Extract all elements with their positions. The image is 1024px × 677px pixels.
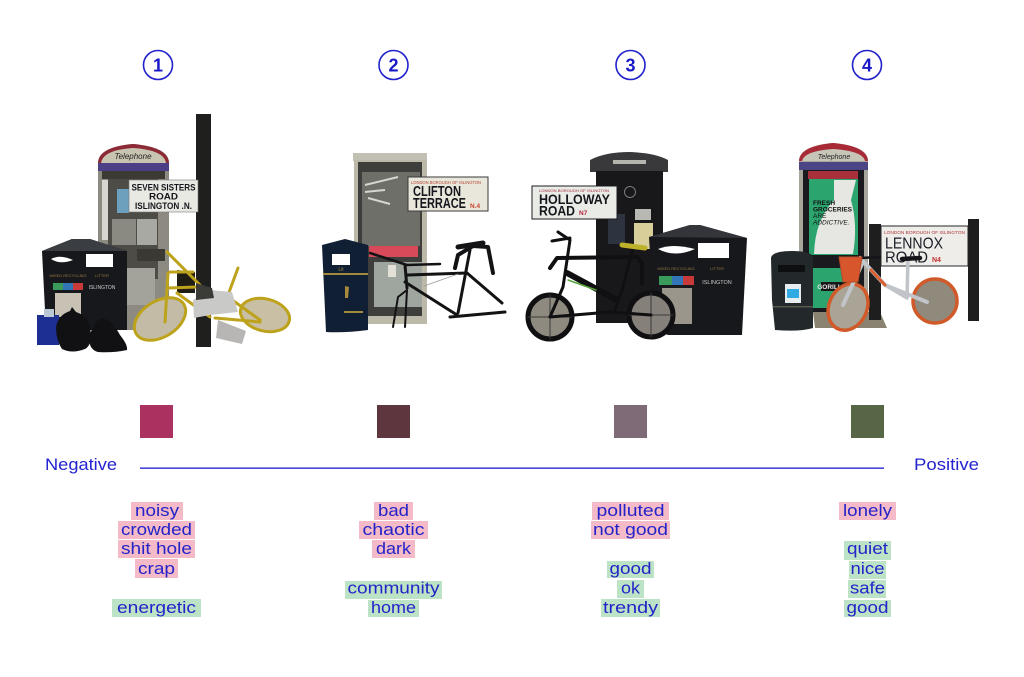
black phone kiosk	[590, 152, 668, 323]
number badge 4: 4	[862, 56, 872, 76]
word list column 1: shit hole	[121, 539, 192, 558]
signposts and street sign: ROAD	[885, 250, 928, 266]
phone box	[98, 144, 169, 330]
street sign: ROAD	[539, 202, 575, 218]
blue box and rubbish bags	[37, 307, 127, 352]
word list column 2	[345, 501, 442, 617]
street sign: N7	[579, 210, 588, 217]
pavement	[813, 312, 887, 328]
number badge 3	[616, 50, 645, 80]
litter bin: MIXED RECYCLING	[49, 273, 87, 278]
street sign: N.4	[470, 203, 480, 210]
word list column 3: ok	[621, 578, 641, 598]
number badge 1: 1	[153, 56, 163, 76]
street sign	[408, 177, 488, 212]
glass phone box	[353, 153, 427, 324]
phone box with advert: Telephone	[818, 154, 850, 161]
phone box with advert: FRESH	[813, 200, 835, 207]
yellow bicycle	[127, 252, 293, 349]
word list column 4	[839, 501, 896, 617]
word list column 4: nice	[850, 559, 884, 578]
street scene 1: Seven Sisters Road	[37, 114, 293, 352]
street sign	[129, 180, 198, 212]
large litter bin: MIXED RECYCLING	[657, 266, 695, 271]
street sign: ROAD	[149, 192, 178, 202]
pole	[196, 114, 211, 347]
street sign: TERRACE	[413, 196, 466, 212]
phone box with advert: GORILLAS	[817, 284, 851, 291]
word list column 2: dark	[376, 539, 412, 558]
word list column 1: crowded	[121, 520, 192, 539]
number badge 4	[852, 50, 882, 80]
bike frame	[370, 243, 505, 327]
word list column 4: quiet	[847, 539, 888, 558]
word list column 4: good	[846, 598, 888, 617]
word list column 2: bad	[378, 501, 409, 520]
word list column 2: home	[371, 598, 416, 617]
street sign	[532, 186, 617, 219]
colour swatch 2	[377, 405, 410, 438]
word list column 3: trendy	[603, 598, 659, 617]
litter bin: LITTER	[95, 273, 109, 278]
positive label: Positive	[914, 455, 979, 474]
number badge 1	[144, 50, 172, 80]
street sign: SEVEN SISTERS	[132, 182, 196, 194]
axis line	[140, 468, 884, 469]
litter bin	[322, 239, 368, 332]
word list column 3: polluted	[596, 501, 664, 520]
word list column 3: not good	[593, 520, 668, 539]
street sign: LONDON BOROUGH OF ISLINGTON	[539, 188, 609, 193]
word list column 2: community	[348, 578, 440, 598]
signposts and street sign	[869, 219, 979, 321]
litter bin	[42, 239, 127, 330]
large litter bin: ISLINGTON	[702, 280, 732, 286]
word list column 1: crap	[138, 559, 175, 578]
sentiment axis	[45, 455, 979, 474]
orange hire bicycle	[821, 257, 957, 337]
number badge 3: 3	[625, 56, 636, 76]
street sign: CLIFTON	[413, 184, 461, 200]
street scene 4: Lennox Road	[771, 143, 979, 337]
round litter bin	[771, 251, 813, 331]
colour swatch 3	[614, 405, 647, 438]
word list column 4: safe	[850, 578, 885, 598]
colour swatch 4	[851, 405, 884, 438]
phone box with advert	[799, 143, 868, 312]
word list column 1: energetic	[117, 598, 197, 617]
large litter bin: LITTER	[710, 266, 724, 271]
number badge 2	[379, 50, 408, 80]
street sign: ISLINGTON .N.	[135, 201, 192, 212]
street scene 2: Clifton Terrace	[322, 153, 505, 332]
word list column 2: chaotic	[362, 520, 425, 539]
large litter bin	[649, 225, 747, 335]
signposts and street sign: LONDON BOROUGH OF ISLINGTON	[884, 230, 965, 235]
word list column 3: good	[610, 559, 652, 578]
signposts and street sign: N4	[932, 257, 941, 264]
phone box: Telephone	[114, 152, 152, 161]
phone box with advert: ADDICTIVE.	[812, 220, 850, 226]
word list column 1: noisy	[135, 501, 180, 520]
street sign: HOLLOWAY	[539, 191, 611, 207]
negative label: Negative	[45, 455, 117, 474]
phone box with advert: GROCERIES	[813, 206, 853, 214]
street scene 3: Holloway Road	[528, 152, 747, 339]
number badge 2: 2	[388, 56, 399, 76]
word list column 1	[112, 501, 201, 617]
word list column 3	[591, 501, 670, 617]
street sign: LONDON BOROUGH OF ISLINGTON	[411, 180, 481, 185]
litter bin: ISLINGTON	[89, 285, 116, 291]
word list column 4: lonely	[843, 501, 893, 520]
folding e-bike	[528, 232, 673, 339]
litter bin: Lit	[338, 267, 344, 273]
signposts and street sign: LENNOX	[885, 236, 943, 252]
colour swatch 1	[140, 405, 173, 438]
tied rubbish on pole	[193, 283, 246, 344]
phone box with advert: ARE	[813, 213, 827, 220]
